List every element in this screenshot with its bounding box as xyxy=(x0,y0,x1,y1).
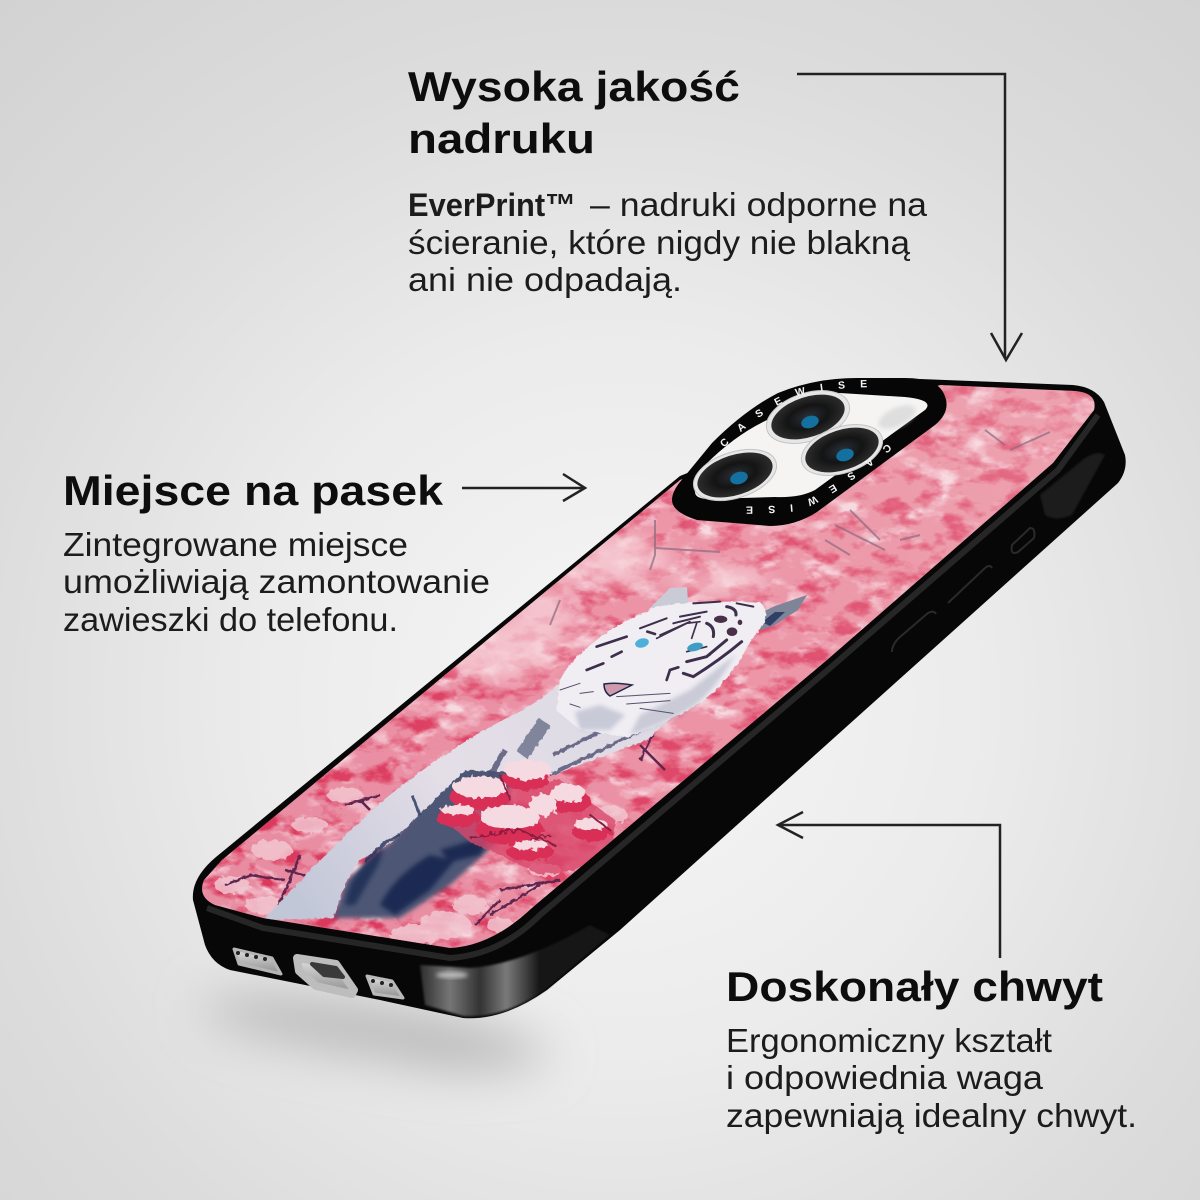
description xyxy=(63,526,490,638)
phone shadow xyxy=(198,979,550,1081)
top lens xyxy=(760,381,856,453)
brand text top: CASEWISE xyxy=(720,380,867,446)
description: ani nie odpadają. xyxy=(408,261,682,298)
head shape xyxy=(556,602,766,737)
red undersides xyxy=(436,766,612,861)
tiger dark fur xyxy=(345,835,490,915)
lower blossoms xyxy=(214,787,628,945)
description: Ergonomiczny kształt xyxy=(726,1022,1052,1059)
nose xyxy=(604,683,632,696)
tiger shadow region xyxy=(333,760,515,918)
heading: nadruku xyxy=(408,115,595,162)
pale tops xyxy=(441,760,607,850)
description: Zintegrowane miejsce xyxy=(63,526,408,563)
tiger head xyxy=(556,587,807,737)
description: ścieranie, które nigdy nie blakną xyxy=(408,224,911,261)
phone in case xyxy=(192,378,1126,1018)
printed artwork xyxy=(190,370,1110,960)
glass xyxy=(694,393,928,499)
heading: Miejsce na pasek xyxy=(63,467,444,514)
heading: Wysoka jakość xyxy=(408,63,740,110)
dark branches xyxy=(225,720,665,925)
blossom texture xyxy=(190,370,1110,960)
description: EverPrint™ xyxy=(408,187,576,223)
heading xyxy=(408,63,740,162)
island frame xyxy=(672,378,947,526)
right speaker xyxy=(367,976,403,998)
text block: strap slot xyxy=(63,467,490,638)
bottom lens xyxy=(687,440,783,510)
facial stripes xyxy=(560,602,753,713)
middle lens xyxy=(795,415,889,485)
description: zawieszki do telefonu. xyxy=(63,601,398,638)
text block: print quality xyxy=(408,63,928,298)
description: i odpowiednia waga xyxy=(726,1059,1044,1096)
side buttons xyxy=(892,528,1034,652)
arrow: strap slot xyxy=(462,474,585,501)
brand text bottom: CASEWISE xyxy=(746,444,891,514)
case rim highlight xyxy=(207,415,1098,958)
body stripes xyxy=(365,712,648,862)
camera island xyxy=(672,378,947,526)
description: zapewniają idealny chwyt. xyxy=(726,1097,1137,1134)
description xyxy=(408,186,928,298)
description: – nadruki odporne na xyxy=(590,186,928,223)
left speaker xyxy=(234,949,281,974)
chin shading xyxy=(575,705,625,730)
case body xyxy=(193,379,1126,1018)
pale mist xyxy=(440,535,770,680)
cheek shading xyxy=(630,655,735,735)
bush shade xyxy=(450,780,615,875)
branches xyxy=(549,429,1050,626)
red texture xyxy=(190,370,1110,960)
glossy corner xyxy=(420,925,610,1016)
bush twigs xyxy=(470,775,610,845)
description: umożliwiają zamontowanie xyxy=(63,563,490,600)
foreground blossom bush xyxy=(436,760,615,875)
charging port xyxy=(297,958,354,994)
lens flash xyxy=(875,400,919,434)
text block: grip xyxy=(726,963,1137,1134)
pink base xyxy=(190,370,1110,960)
description xyxy=(726,1022,1137,1134)
arrow: print quality xyxy=(797,74,1022,360)
right ear xyxy=(758,595,807,630)
eyes xyxy=(635,638,649,648)
arrow: grip xyxy=(778,812,1000,958)
left ear xyxy=(648,587,688,610)
tiger body xyxy=(264,684,667,920)
heading: Doskonały chwyt xyxy=(726,963,1103,1010)
side slot xyxy=(1040,453,1105,518)
